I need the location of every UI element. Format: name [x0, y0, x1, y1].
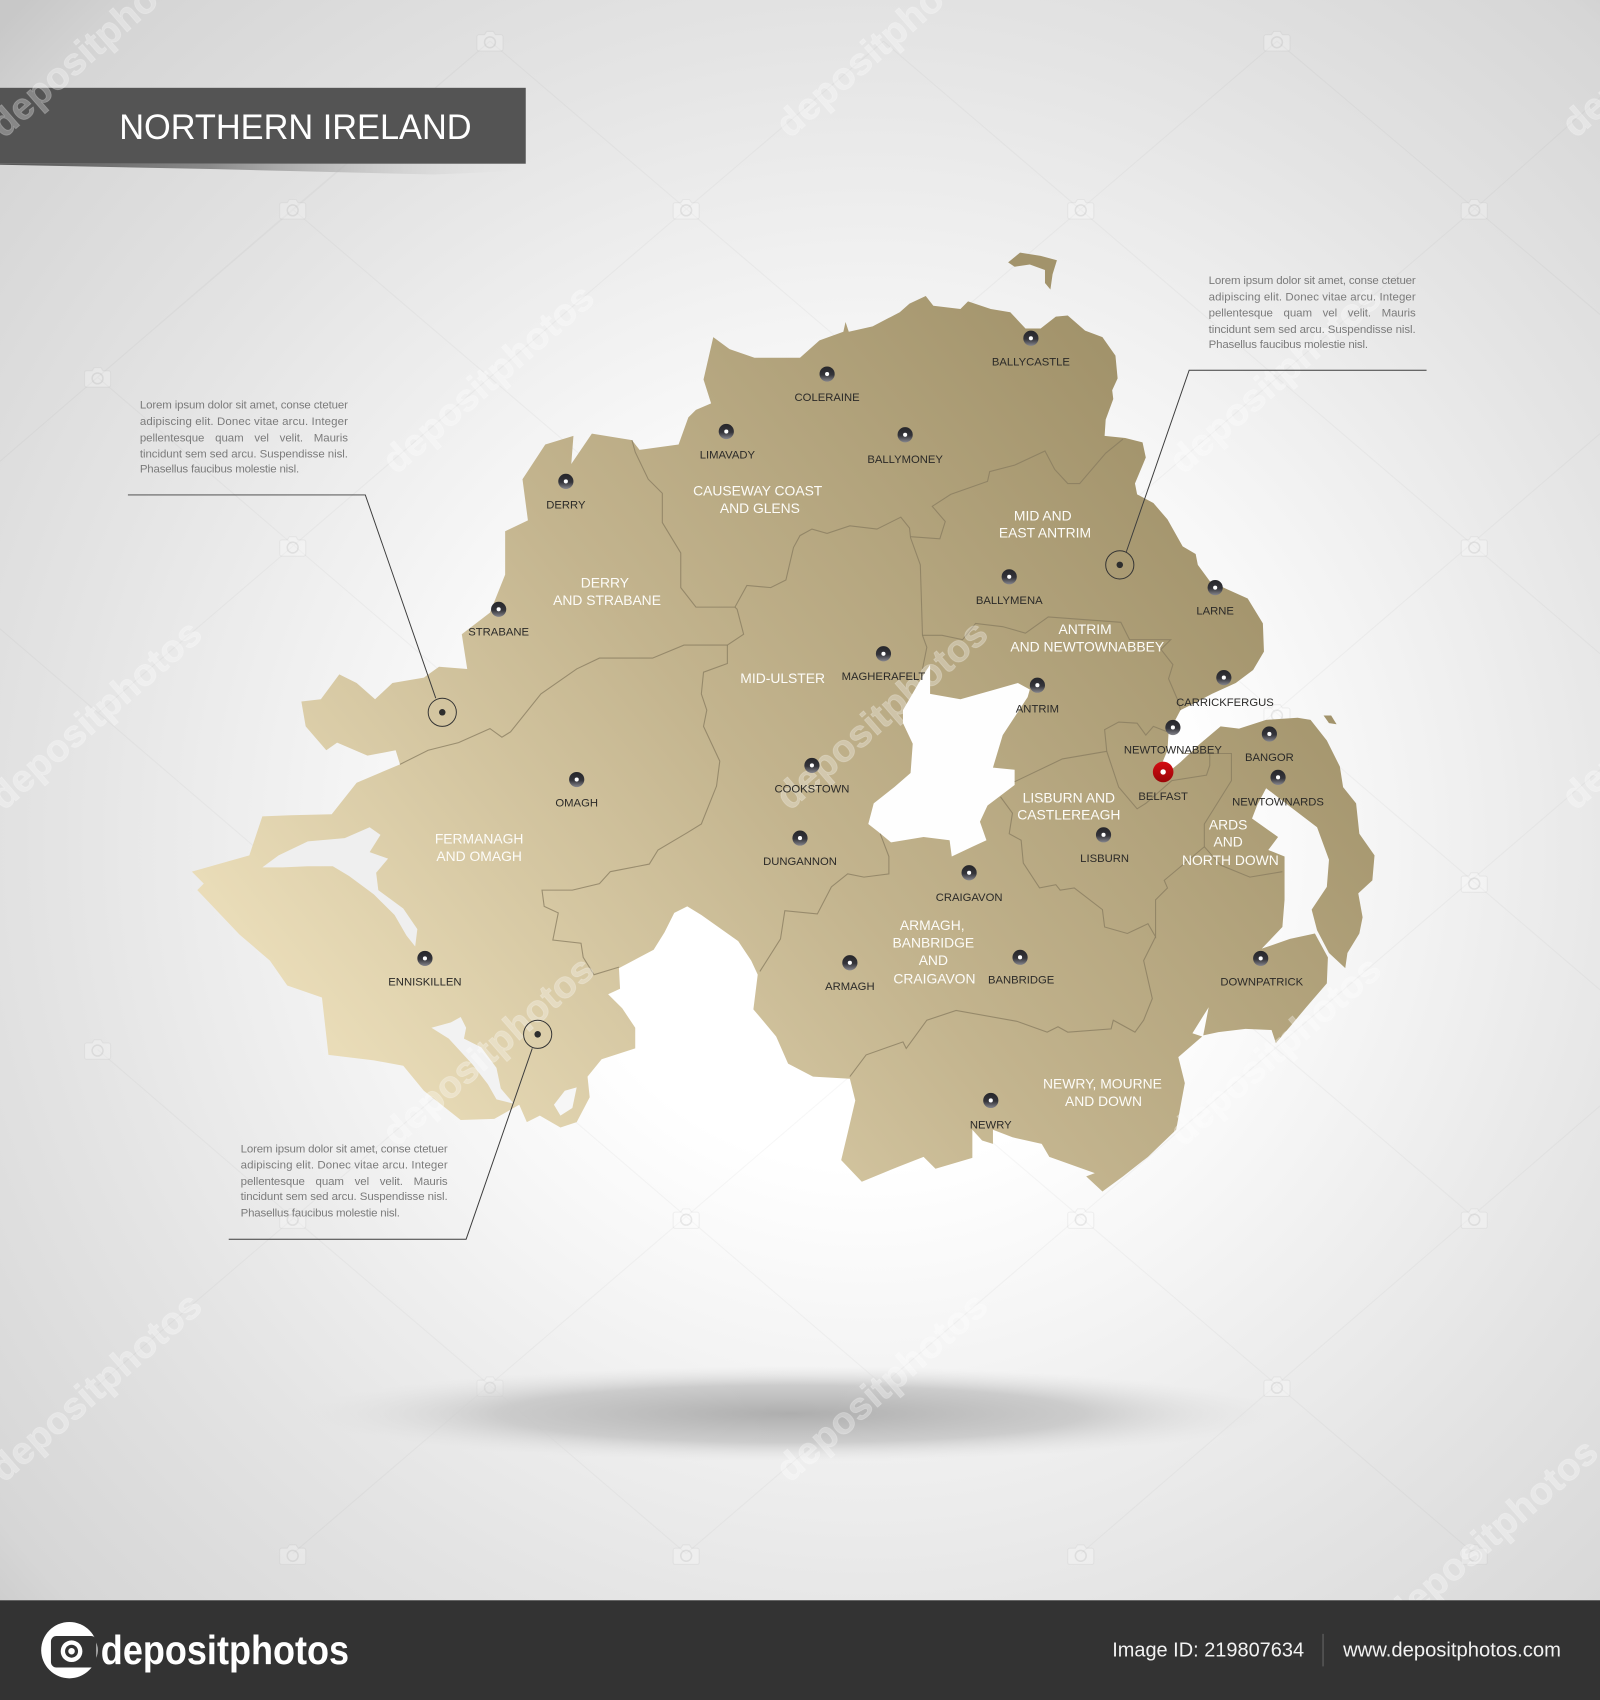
callout: left	[128, 400, 456, 726]
callout: left: pellentesque quam vel velit. Mauris	[140, 432, 348, 444]
region: Causeway Coast and Glens: CAUSEWAY COAST	[693, 482, 823, 498]
region: Lisburn and Castlereagh: CASTLEREAGH	[1017, 807, 1120, 823]
watermark logos: depositphotos	[768, 1284, 996, 1490]
city: Ballycastle	[992, 331, 1070, 368]
region: Ards and North Down: ARDS	[1209, 816, 1247, 832]
map: Rathlin Island	[1008, 253, 1057, 289]
callout: bottom: adipiscing elit. Donec vitae arcu. Integer	[241, 1160, 448, 1172]
city: Lisburn: LISBURN	[1080, 853, 1129, 865]
title banner	[0, 88, 526, 175]
map: Lower Lough Erne	[431, 1017, 514, 1104]
callout: right: adipiscing elit. Donec vitae arcu. Integer	[1209, 291, 1416, 303]
city: Derry	[546, 474, 586, 511]
city: Limavady: LIMAVADY	[700, 450, 755, 462]
city: Ballymena: BALLYMENA	[976, 595, 1043, 607]
callout: right: Phasellus faucibus molestie nisl.	[1209, 339, 1368, 351]
region: Newry, Mourne and Down: NEWRY, MOURNE	[1043, 1076, 1162, 1092]
city: Strabane: STRABANE	[468, 626, 529, 638]
region: Armagh, Banbridge and Craigavon: BANBRIDGE	[893, 935, 974, 951]
region: Ards and North Down: AND	[1214, 834, 1243, 850]
city: Magherafelt	[842, 646, 925, 683]
watermark logos: depositphotos	[1378, 1431, 1600, 1637]
city: Lisburn	[1080, 827, 1129, 865]
region: Derry and Strabane: AND STRABANE	[553, 592, 661, 608]
footer bar	[0, 1600, 1600, 1700]
region: Lisburn and Castlereagh: LISBURN AND	[1023, 789, 1115, 805]
watermark logos: depositphotos	[1162, 276, 1390, 482]
callout: right	[1106, 275, 1427, 579]
watermark logos: depositphotos	[375, 948, 603, 1154]
footer: logo: depositphotos	[101, 1627, 349, 1673]
callout: right: Lorem ipsum dolor sit amet, conse ctetuer	[1209, 275, 1416, 287]
region: Armagh, Banbridge and Craigavon: ARMAGH,	[900, 917, 965, 933]
callout: left: Phasellus faucibus molestie nisl.	[140, 464, 299, 476]
callout: right: tincidunt sem sed arcu. Suspendisse nisl.	[1209, 324, 1416, 336]
map: Lough Neagh	[868, 665, 1030, 857]
city: Cookstown	[774, 758, 849, 796]
city: Derry: DERRY	[546, 499, 586, 511]
map of Northern Ireland	[192, 253, 1375, 1192]
city: Downpatrick: DOWNPATRICK	[1220, 977, 1304, 989]
city: Coleraine	[795, 366, 860, 404]
region: Ards and North Down: NORTH DOWN	[1182, 852, 1279, 868]
region: Derry and Strabane: DERRY	[581, 575, 629, 591]
city: Omagh	[555, 772, 598, 810]
city: Bangor: BANGOR	[1245, 752, 1294, 764]
city: Enniskillen: ENNISKILLEN	[388, 977, 462, 989]
watermark camera icons	[85, 31, 1487, 1564]
city: Ballymena	[976, 569, 1043, 607]
city: Larne	[1196, 580, 1234, 618]
city: Limavady	[700, 424, 755, 462]
callout: bottom: tincidunt sem sed arcu. Suspendisse nisl.	[241, 1191, 448, 1203]
callout: left: tincidunt sem sed arcu. Suspendisse nisl.	[140, 449, 348, 461]
city: Newtownards: NEWTOWNARDS	[1232, 797, 1324, 809]
watermark logos: depositphotos	[375, 276, 603, 482]
callout: bottom: pellentesque quam vel velit. Mauris	[241, 1176, 448, 1188]
watermark logos: depositphotos	[768, 612, 996, 818]
city: Larne: LARNE	[1196, 606, 1234, 618]
city: Downpatrick	[1220, 951, 1304, 989]
city: Enniskillen	[388, 951, 462, 989]
city: Newry: NEWRY	[970, 1120, 1012, 1132]
city: Newtownards	[1232, 770, 1324, 809]
city: Newry	[970, 1093, 1012, 1132]
map: small islet	[1324, 716, 1337, 724]
city: Coleraine: COLERAINE	[795, 392, 860, 404]
city: Armagh	[825, 955, 875, 993]
region labels	[435, 482, 1279, 1109]
region: Armagh, Banbridge and Craigavon: CRAIGAVON	[893, 970, 975, 986]
callout: left: Lorem ipsum dolor sit amet, conse ctetuer	[140, 400, 348, 412]
city: Dungannon: DUNGANNON	[763, 856, 837, 868]
city: Belfast (capital): BELFAST	[1138, 791, 1188, 803]
region: Fermanagh and Omagh: FERMANAGH	[435, 830, 523, 846]
city markers	[388, 331, 1324, 1132]
footer: logo	[41, 1622, 349, 1678]
city: Craigavon: CRAIGAVON	[936, 892, 1002, 904]
city: Carrickfergus	[1176, 670, 1274, 709]
callout: bottom: Phasellus faucibus molestie nisl.	[241, 1207, 400, 1219]
city: Craigavon	[936, 865, 1002, 904]
callout: left: adipiscing elit. Donec vitae arcu. Integer	[140, 416, 348, 428]
city: Newtownabbey: NEWTOWNABBEY	[1124, 745, 1222, 757]
city: Banbridge: BANBRIDGE	[988, 974, 1055, 986]
city: Dungannon	[763, 830, 837, 868]
region: Fermanagh and Omagh: AND OMAGH	[436, 848, 522, 864]
map: district boundaries	[400, 439, 1282, 1077]
city: Carrickfergus: CARRICKFERGUS	[1176, 697, 1274, 709]
city: Strabane	[468, 602, 529, 638]
city: Ballymoney	[867, 427, 943, 466]
city: Belfast (capital)	[1138, 762, 1188, 803]
region: Newry, Mourne and Down: AND DOWN	[1065, 1093, 1142, 1109]
region: Mid and East Antrim: MID AND	[1014, 507, 1072, 523]
city: Armagh: ARMAGH	[825, 981, 875, 993]
city: Newtownabbey	[1124, 720, 1222, 757]
city: Ballymoney: BALLYMONEY	[867, 454, 943, 466]
city: Ballycastle: BALLYCASTLE	[992, 356, 1070, 368]
city: Omagh: OMAGH	[555, 798, 598, 810]
footer: website: www.depositphotos.com	[1342, 1640, 1561, 1662]
region: Causeway Coast and Glens: AND GLENS	[720, 500, 800, 516]
city: Magherafelt: MAGHERAFELT	[842, 671, 925, 683]
map: small lough	[554, 1087, 577, 1116]
ground shadow	[304, 1366, 1279, 1461]
watermark logos: depositphotos	[1162, 948, 1390, 1154]
city: Antrim: ANTRIM	[1016, 703, 1059, 715]
callout: bottom: Lorem ipsum dolor sit amet, conse ctetuer	[241, 1143, 448, 1155]
region: Antrim and Newtownabbey: AND NEWTOWNABBEY	[1010, 639, 1164, 655]
city: Antrim	[1016, 678, 1059, 715]
map: land mass	[192, 296, 1375, 1192]
city: Cookstown: COOKSTOWN	[774, 784, 849, 796]
region: Armagh, Banbridge and Craigavon: AND	[919, 952, 948, 968]
footer: image id: Image ID: 219807634	[1112, 1640, 1304, 1662]
region: Mid-Ulster: MID-ULSTER	[740, 670, 825, 686]
region: Antrim and Newtownabbey: ANTRIM	[1059, 621, 1112, 637]
city: Banbridge	[988, 950, 1055, 986]
city: Bangor	[1245, 726, 1294, 764]
callout: bottom	[229, 1020, 552, 1239]
region: Mid and East Antrim: EAST ANTRIM	[999, 525, 1091, 541]
map: Upper Lough Erne	[262, 827, 417, 946]
callout: right: pellentesque quam vel velit. Mauris	[1209, 308, 1416, 320]
title banner: NORTHERN IRELAND	[119, 108, 472, 147]
